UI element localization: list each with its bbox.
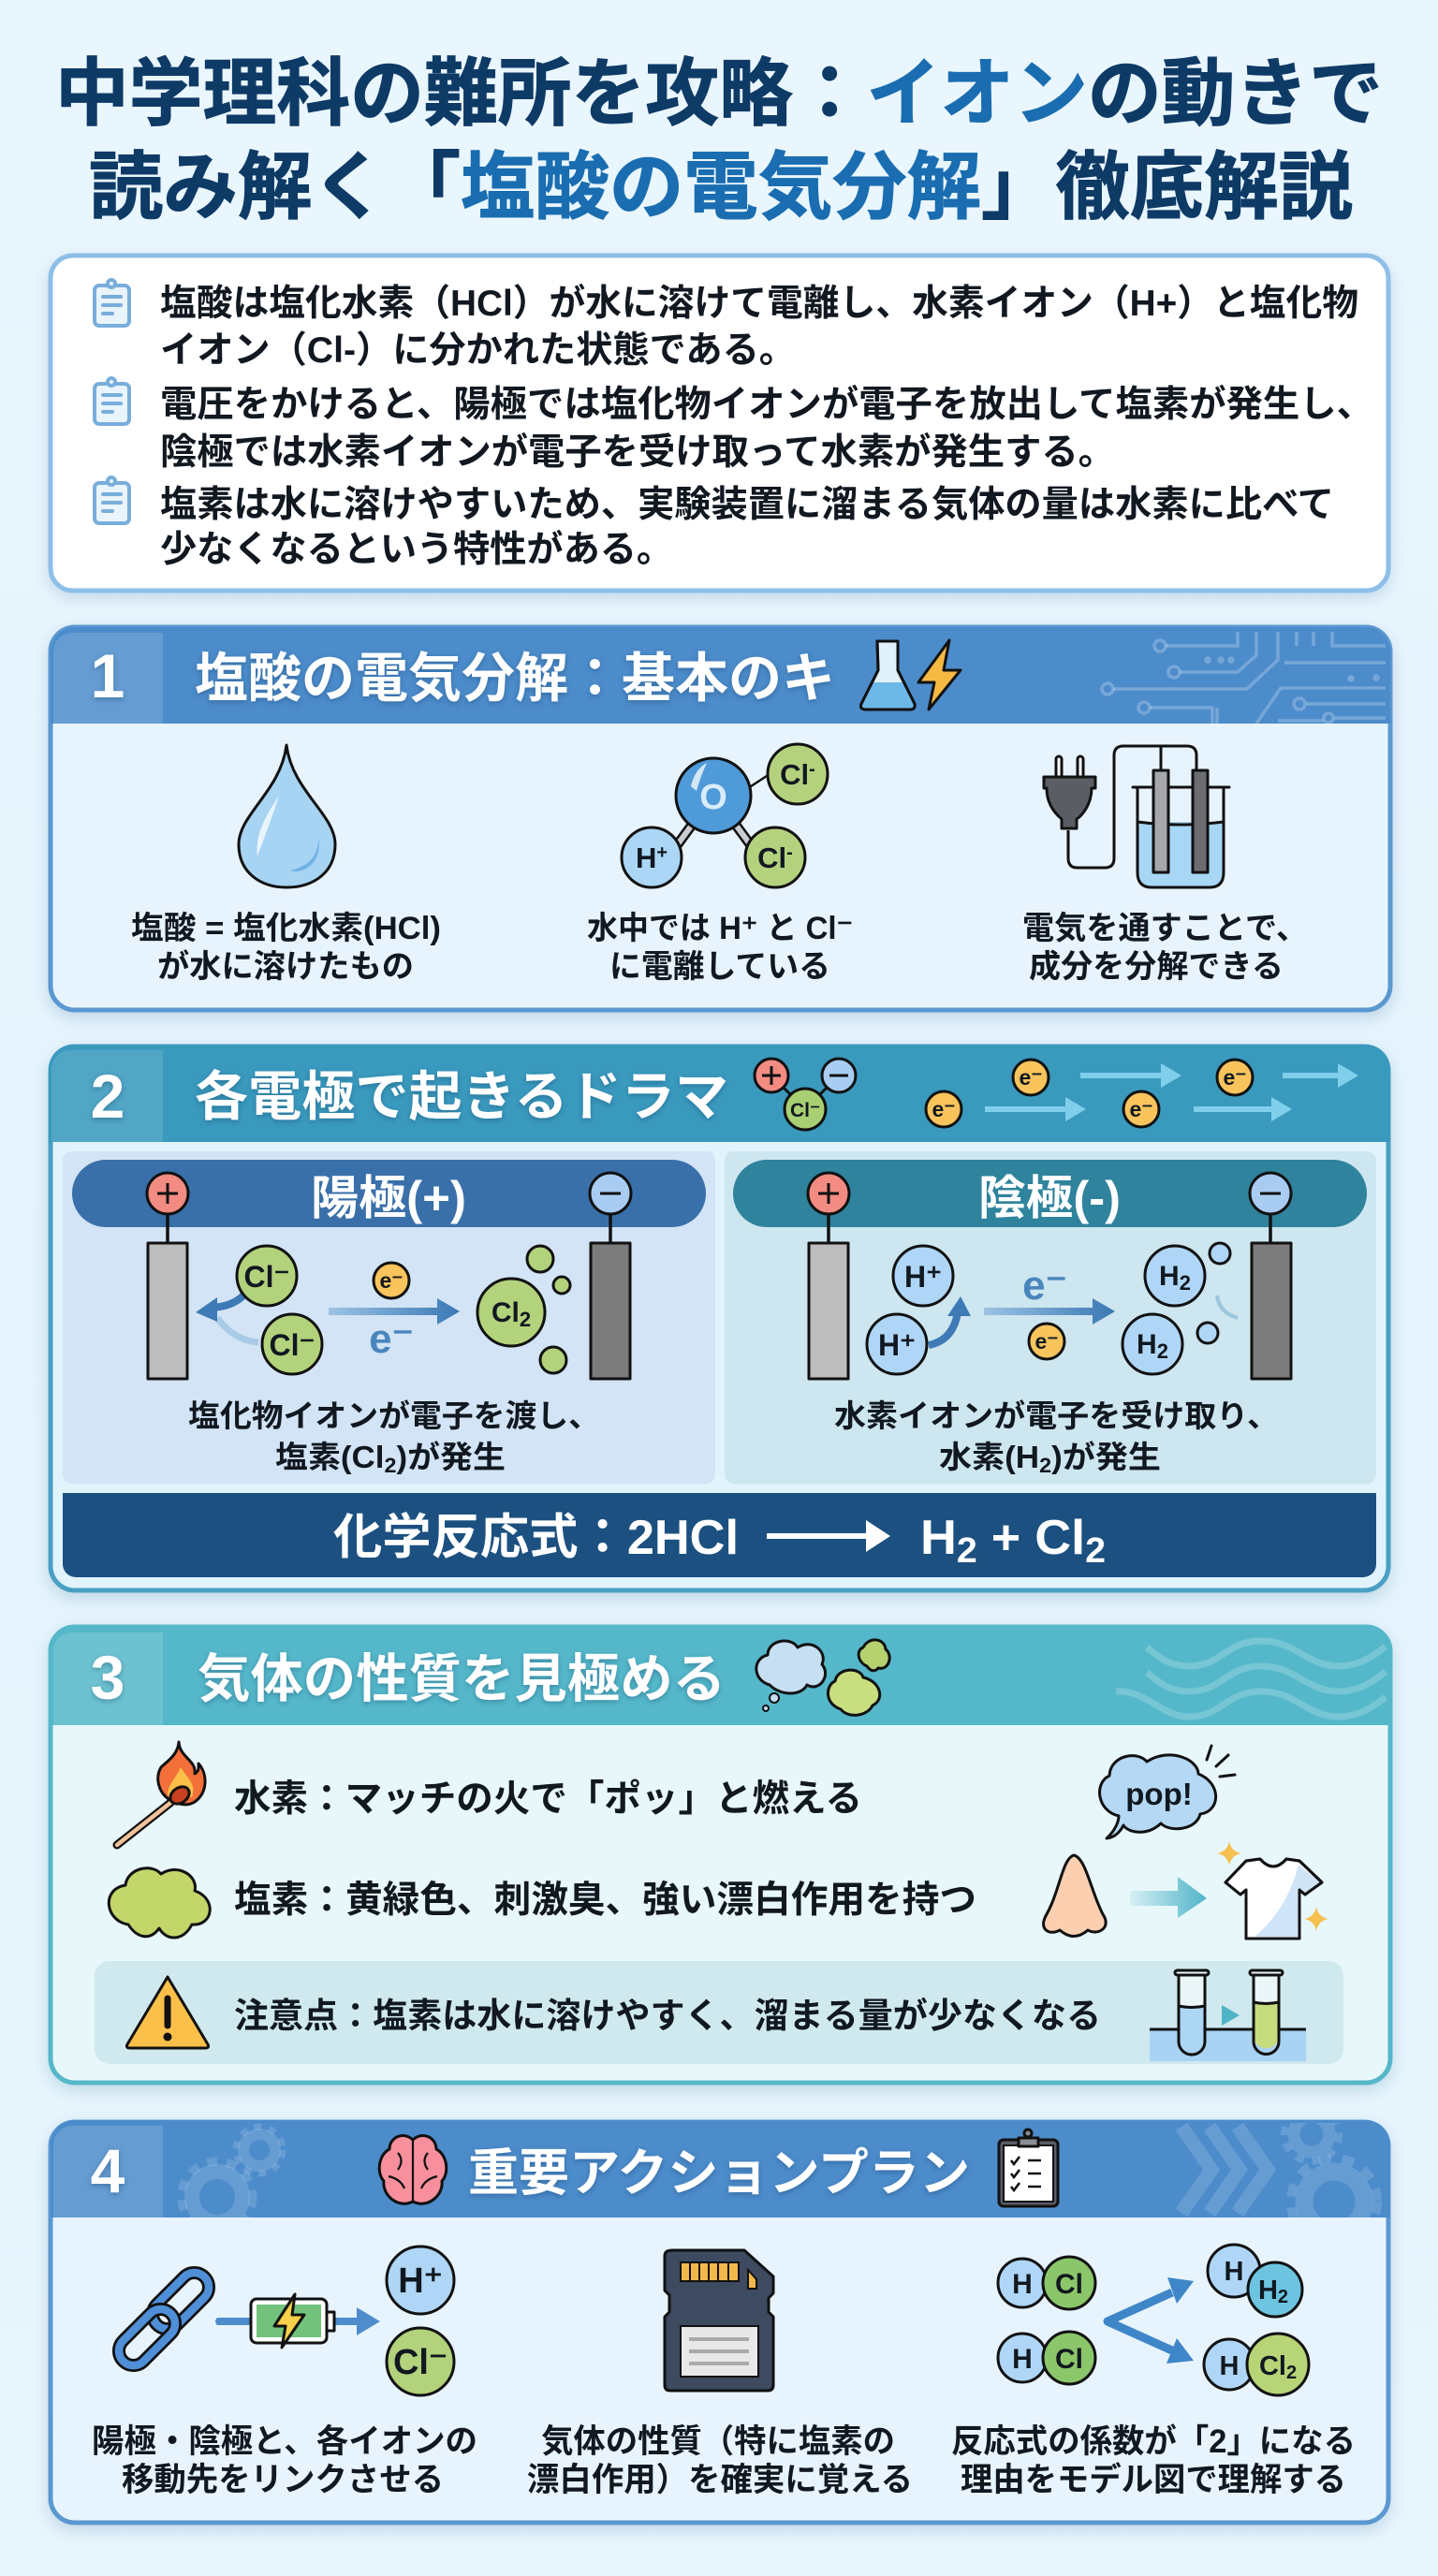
cathode electrode right (1250, 1173, 1291, 1379)
cathode caption (834, 1398, 1279, 1477)
caption: memorize gas properties (527, 2423, 913, 2498)
gear and chevron decoration (178, 2123, 1382, 2217)
icon: reaction model: H (1012, 2344, 1033, 2375)
caption: coefficient model: 反応式の係数が「2」になる (951, 2423, 1356, 2460)
icon: pop bubble (1100, 1746, 1235, 1838)
icon: ion molecule: H+ (636, 842, 668, 874)
panel: summary (51, 256, 1388, 591)
caption: hydrochloric acid (131, 911, 441, 985)
caption: electrolysis: 電気を通すことで、 (1022, 911, 1308, 946)
caption: electrolysis: 成分を分解できる (1029, 949, 1284, 985)
section heading: 各電極で起きるドラマ (195, 1067, 728, 1127)
section number: 4 (91, 2136, 125, 2205)
summary text (160, 283, 1373, 570)
electron arrow: e⁻ (1022, 1263, 1067, 1309)
icon: warning triangle (126, 1977, 209, 2048)
electron arrow: e⁻ (1035, 1329, 1058, 1354)
section number: 3 (91, 1643, 125, 1712)
icon: pop bubble: pop! (1125, 1777, 1193, 1811)
hydrogen molecules (1123, 1243, 1238, 1374)
icon: reaction model: H (1012, 2269, 1033, 2300)
hydrogen molecules: H2 (1159, 1261, 1191, 1295)
icon: header electron flow: e⁻ (1130, 1097, 1152, 1121)
chemical equation bar: H2 + Cl2 (920, 1511, 1106, 1571)
electron arrow: e⁻ (380, 1268, 403, 1293)
icon: header electron flow: e⁻ (1020, 1065, 1042, 1090)
icon: checklist clipboard (999, 2130, 1058, 2206)
hydrogen ions: H⁺ (904, 1260, 942, 1294)
icon: ion molecule: O (699, 778, 727, 817)
caption: link electrodes: 陽極・陰極と、各イオンの (92, 2423, 477, 2460)
icon: clipboard 1 (95, 280, 129, 326)
summary text: 陰極では水素イオンが電子を受け取って水素が発生する。 (160, 432, 1115, 473)
section heading: 塩酸の電気分解：基本のキ (195, 649, 835, 709)
caption: memorize gas properties: 気体の性質（特に塩素の (541, 2423, 895, 2460)
icon: brain (379, 2135, 447, 2203)
icon: water drop (239, 745, 335, 887)
caption: ionization: 水中では H⁺ と Cl⁻ (587, 911, 853, 946)
icon: clipboard 3 (95, 477, 129, 523)
icon: bleached shirt (1217, 1841, 1328, 1939)
section number: 1 (91, 641, 125, 710)
chlorine molecule (477, 1246, 570, 1373)
icon: gas clouds (756, 1640, 889, 1715)
hydrogen property: 水素：マッチの火で「ポッ」と燃える (234, 1778, 862, 1820)
chlorine property: 塩素：黄緑色、刺激臭、強い漂白作用を持つ (234, 1880, 976, 1921)
caption: memorize gas properties: 漂白作用）を確実に覚える (527, 2462, 913, 2498)
icon: plug and beaker (1044, 746, 1229, 887)
caption: electrolysis (1022, 911, 1308, 985)
anode caption (188, 1398, 600, 1477)
icon: ion molecule: Cl- (757, 842, 793, 874)
panel: anode (63, 1151, 715, 1484)
anode caption: 塩素(Cl 2)が発生 (275, 1440, 506, 1477)
icon: header electron flow: e⁻ (1224, 1065, 1246, 1090)
caption: link electrodes: 移動先をリンクさせる (122, 2462, 444, 2498)
cathode caption: 水素イオンが電子を受け取り、 (834, 1398, 1279, 1433)
icon: header ions (755, 1059, 856, 1130)
circuit decoration (1102, 632, 1386, 724)
panel: section 2 electrodes (49, 1045, 1390, 1590)
icon: nose (1044, 1855, 1106, 1936)
icon: header electron flow (926, 1060, 1358, 1127)
icon: reaction model: Cl (1055, 2344, 1083, 2375)
panel: cathode (725, 1151, 1376, 1484)
ions H+ Cl-: Cl⁻ (393, 2343, 448, 2382)
hydrogen ions: H⁺ (878, 1328, 916, 1362)
chloride ions: Cl⁻ (270, 1328, 315, 1362)
hydrogen molecules: H2 (1137, 1329, 1168, 1363)
icon: lightning bolt (918, 640, 961, 710)
title (55, 51, 1383, 228)
section heading: 気体の性質を見極める (198, 1649, 726, 1708)
arrow: nose to shirt (1130, 1877, 1207, 1918)
icon: ion molecule: Cl- (780, 758, 815, 791)
ions H+ Cl- (387, 2247, 454, 2395)
title: 読み解く「塩酸の電気分解」徹底解説 (89, 145, 1353, 228)
icon: header electron flow: e⁻ (932, 1097, 955, 1121)
icon: flask (861, 641, 915, 710)
section number: 2 (91, 1061, 125, 1131)
icon: reaction model: Cl (1055, 2269, 1083, 2300)
chloride ions: Cl⁻ (244, 1260, 289, 1294)
icon: ion molecule (622, 744, 828, 887)
summary text: 少なくなるという特性がある。 (160, 529, 673, 570)
arrows: reaction split (1108, 2277, 1194, 2364)
chemical equation bar: 化学反応式：2HCl (333, 1511, 739, 1565)
arrow: battery to ions (215, 2307, 380, 2335)
chloride ions (196, 1246, 322, 1374)
caption: ionization: に電離している (609, 949, 830, 985)
icon: reaction model: H2 (1258, 2276, 1288, 2307)
chlorine molecule: Cl2 (492, 1297, 531, 1331)
chemical equation bar (63, 1493, 1376, 1577)
cathode electrode left (808, 1173, 849, 1379)
electron arrow (984, 1263, 1115, 1359)
anode electrode right (590, 1173, 631, 1379)
caution panel (95, 1961, 1343, 2064)
icon: battery (251, 2294, 334, 2348)
cathode heading: 陰極(-) (978, 1172, 1121, 1224)
panel: section 3 gas properties (51, 1627, 1390, 2083)
icon: clipboard 2 (95, 378, 129, 424)
icon: reaction model (998, 2245, 1309, 2395)
title: 中学理科の難所を攻略：イオンの動きで (55, 51, 1383, 135)
icon: reaction model: Cl2 (1259, 2351, 1297, 2383)
icon: test tubes (1150, 1970, 1306, 2061)
icon: chain link (113, 2267, 214, 2371)
wave decoration (1116, 1641, 1386, 1717)
caption: ionization (587, 911, 853, 985)
icon: header ions: Cl⁻ (790, 1100, 820, 1121)
caption: hydrochloric acid: 塩酸 = 塩化水素(HCl) (131, 911, 441, 946)
hydrogen ions (867, 1246, 971, 1374)
anode label pill (72, 1160, 706, 1227)
anode electrode left (147, 1173, 188, 1379)
caption: coefficient model: 理由をモデル図で理解する (961, 2461, 1346, 2498)
caption: hydrochloric acid: が水に溶けたもの (157, 948, 414, 985)
icon: reaction model: H (1225, 2257, 1243, 2287)
caption: coefficient model (951, 2423, 1356, 2498)
summary text: 電圧をかけると、陽極では塩化物イオンが電子を放出して塩素が発生し、 (160, 384, 1373, 425)
cathode label pill (733, 1160, 1367, 1227)
caution text: 注意点：塩素は水に溶けやすく、溜まる量が少なくなる (234, 1997, 1101, 2035)
panel: section 1 basics (51, 627, 1390, 1010)
summary text: イオン（Cl-）に分かれた状態である。 (160, 329, 796, 371)
ions H+ Cl-: H⁺ (398, 2261, 443, 2301)
caption: link electrodes (92, 2423, 477, 2498)
electron arrow: e⁻ (369, 1316, 414, 1362)
icon: reaction model: H (1220, 2351, 1239, 2381)
panel: section 4 action plan (51, 2107, 1390, 2523)
icon: chlorine cloud (109, 1868, 210, 1938)
cathode caption: 水素(H 2)が発生 (939, 1440, 1161, 1477)
anode heading: 陽極(+) (311, 1172, 466, 1224)
icon: match (117, 1742, 205, 1845)
electron arrow (329, 1263, 460, 1362)
anode caption: 塩化物イオンが電子を渡し、 (188, 1398, 600, 1433)
summary text: 塩酸は塩化水素（HCl）が水に溶けて電離し、水素イオン（H+）と塩化物 (160, 283, 1358, 324)
summary text: 塩素は水に溶けやすいため、実験装置に溜まる気体の量は水素に比べて (160, 484, 1334, 525)
icon: memory card (665, 2250, 773, 2391)
section heading: 重要アクションプラン (468, 2145, 970, 2202)
